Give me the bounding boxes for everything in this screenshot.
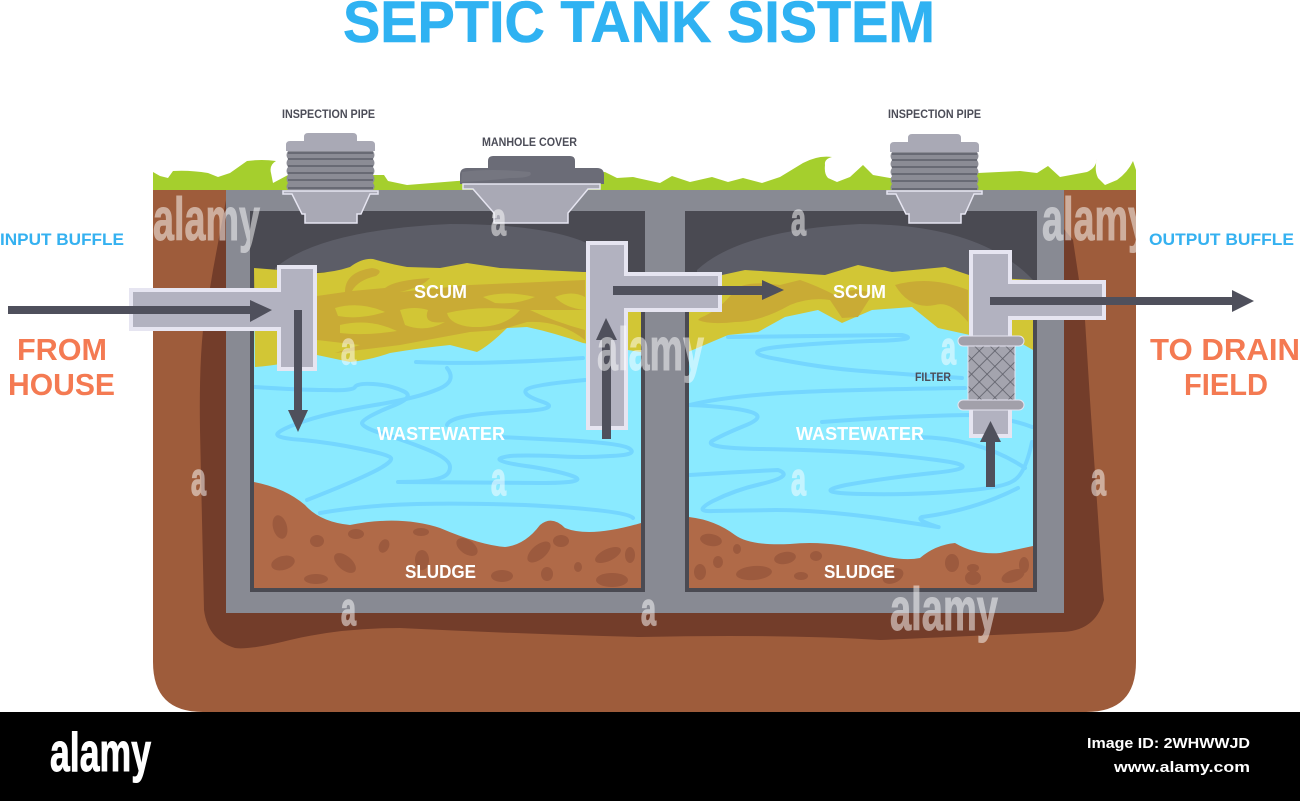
pipe base — [887, 191, 982, 223]
from house label: HOUSE — [8, 367, 115, 402]
manhole cover — [460, 156, 604, 223]
grass — [153, 157, 1136, 192]
arrow: through to second chamber — [613, 280, 784, 300]
scum streaks — [698, 280, 968, 323]
filter assembly — [958, 336, 1024, 410]
to drain field label: TO DRAIN — [1150, 332, 1300, 367]
sludge label right: SLUDGE — [824, 561, 895, 582]
wastewater swirl lines — [690, 335, 1032, 527]
inspection pipe label left: INSPECTION PIPE — [282, 109, 375, 121]
arrow: up through transfer pipe — [596, 318, 617, 439]
input buffle label: INPUT BUFFLE — [0, 231, 124, 249]
filter mesh — [968, 346, 1015, 400]
footer bar — [0, 712, 1300, 801]
upper collar — [958, 336, 1024, 346]
right inspection pipe — [887, 134, 982, 223]
from house label — [8, 332, 115, 402]
pipe ribs — [890, 152, 978, 191]
to drain field label: FIELD — [1184, 367, 1268, 402]
stock watermarks: a — [1091, 453, 1106, 505]
wastewater swirl lines — [255, 358, 633, 518]
arrow: up into filter — [980, 421, 1001, 487]
chamber air space — [250, 211, 645, 592]
stock watermarks: a — [641, 583, 656, 635]
cover lid — [460, 156, 604, 184]
image id: Image ID: 2WHWWJD — [1087, 735, 1250, 752]
pipe base — [283, 191, 378, 223]
gas dome — [697, 224, 1033, 290]
arrow: from house into tank — [8, 300, 272, 322]
site address: www.alamy.com — [1113, 759, 1250, 776]
stock watermarks: a — [191, 453, 206, 505]
stock watermarks: alamy — [153, 186, 260, 253]
stock watermarks: a — [791, 193, 806, 245]
chamber border — [252, 213, 643, 590]
gas dome — [275, 224, 600, 272]
stock watermarks: a — [491, 453, 506, 505]
left inspection pipe — [283, 133, 378, 223]
output baffle pipe — [971, 252, 1104, 436]
right chamber — [685, 211, 1037, 592]
stock watermarks: alamy — [597, 316, 704, 383]
output buffle label: OUTPUT BUFFLE — [1149, 231, 1294, 249]
inspection pipe label right: INSPECTION PIPE — [888, 109, 981, 121]
stock watermarks: alamy — [1042, 186, 1149, 253]
sludge pebbles — [270, 514, 635, 587]
cover neck — [463, 184, 600, 223]
scum layer — [688, 265, 1033, 352]
from house label: FROM — [17, 332, 107, 367]
pipe cap — [286, 133, 375, 151]
footer logo: alamy — [50, 721, 151, 783]
sludge — [254, 482, 641, 588]
pipe cap — [890, 134, 979, 152]
stock watermarks: a — [341, 583, 356, 635]
left chamber — [250, 211, 645, 592]
stock watermarks: a — [791, 453, 806, 505]
arrow: down into wastewater — [288, 310, 308, 432]
scum label left: SCUM — [414, 281, 467, 302]
stock watermarks: a — [941, 322, 956, 374]
scum layer — [254, 259, 641, 367]
cover highlight — [461, 170, 531, 182]
pipe ribs — [286, 151, 374, 190]
scum streaks — [317, 268, 585, 353]
stock watermarks: a — [491, 193, 506, 245]
filter label: FILTER — [915, 370, 951, 384]
chamber border — [687, 213, 1035, 590]
arrow: out to drain field — [990, 290, 1254, 312]
dark soil around tank — [200, 200, 1104, 648]
chamber air space — [685, 211, 1037, 592]
lower collar — [958, 400, 1024, 410]
stock watermarks: a — [341, 322, 356, 374]
stock watermarks — [153, 186, 1149, 643]
wastewater — [689, 305, 1033, 588]
wastewater label left: WASTEWATER — [377, 423, 505, 444]
scum label right: SCUM — [833, 281, 886, 302]
sludge — [689, 517, 1033, 588]
concrete tank shell — [226, 190, 1064, 613]
labels inside tank — [377, 281, 951, 582]
wastewater label right: WASTEWATER — [796, 423, 924, 444]
soil — [153, 190, 1136, 712]
wastewater — [254, 320, 641, 588]
manhole cover label: MANHOLE COVER — [482, 137, 578, 149]
sludge pebbles — [694, 532, 1029, 587]
input baffle pipe — [131, 267, 315, 369]
stock watermarks: alamy — [890, 576, 998, 643]
to drain field label — [1150, 332, 1300, 402]
sludge label left: SLUDGE — [405, 561, 476, 582]
transfer baffle pipe — [588, 243, 720, 428]
